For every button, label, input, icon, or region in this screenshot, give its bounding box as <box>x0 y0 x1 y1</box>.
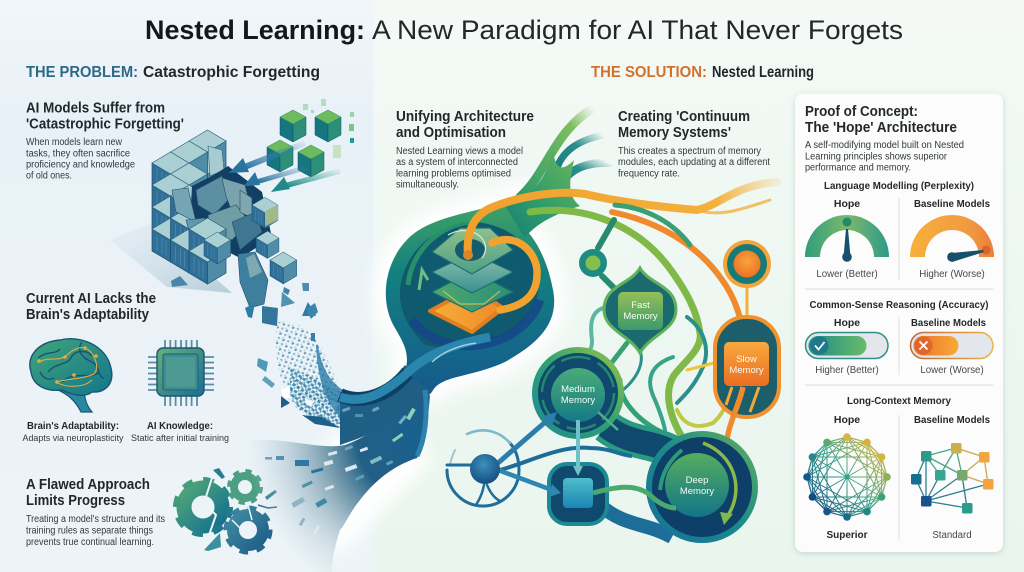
medium memory module <box>535 350 621 436</box>
heading: the solution: THE SOLUTION: <box>591 64 707 81</box>
metric: long-context memory <box>803 395 994 541</box>
arrow: input to square <box>498 470 561 497</box>
icon: brain <box>30 339 112 412</box>
diagram: continuum memory network <box>447 205 779 540</box>
gauge: hope <box>805 215 889 262</box>
text block: AI models suffer: 'Catastrophic Forgetting' <box>26 116 184 132</box>
gauge: baseline <box>910 215 994 262</box>
orange tube <box>468 182 777 255</box>
text block: continuum memory systems: Memory Systems' <box>618 125 731 141</box>
green band under orange tube <box>530 210 700 455</box>
text block: unifying architecture: learning problems optimised <box>396 168 511 180</box>
text block: a flawed approach <box>26 477 165 548</box>
small square module <box>549 464 607 524</box>
card description: performance and memory. <box>805 162 911 174</box>
caption: brain's adaptability: Brain's Adaptability: <box>27 421 119 432</box>
toggle: baseline <box>910 332 993 358</box>
text block: continuum memory systems: This creates a spectrum of memory <box>618 146 761 157</box>
text block: a flawed approach: Limits Progress <box>26 493 125 509</box>
text block: continuum memory systems: modules, each updating at a different <box>618 157 770 168</box>
metric: language modelling: Lower (Better) <box>816 269 878 280</box>
metric: long-context memory: Hope <box>834 414 860 426</box>
metric: common-sense reasoning: Higher (Better) <box>815 365 879 376</box>
text block: AI models suffer: When models learn new <box>26 137 123 148</box>
arrow: input to medium <box>498 412 557 463</box>
network: hope dense <box>803 433 891 521</box>
fast memory module: Memory <box>623 311 658 322</box>
text block: AI models suffer: proficiency and knowledge <box>26 160 135 170</box>
title continuation: A New Paradigm for AI That Never Forgets <box>372 15 903 45</box>
link core: medium to deep <box>606 426 672 452</box>
diagram: flowing stream and nested stack <box>240 108 777 572</box>
metric: common-sense reasoning: Baseline Models <box>911 317 986 329</box>
metric: long-context memory: Long-Context Memory <box>847 395 951 407</box>
text block: a flawed approach: prevents true continual learning. <box>26 537 154 548</box>
small green node <box>579 249 607 277</box>
card description: A self-modifying model built on Nested <box>805 140 964 151</box>
slow memory module <box>715 317 779 463</box>
text block: unifying architecture <box>396 109 534 190</box>
icon: scattering fragments and particles <box>245 252 368 428</box>
text block: unifying architecture: simultaneously. <box>396 180 459 190</box>
icon: broken gears <box>176 468 277 552</box>
card heading <box>805 104 957 136</box>
text block: current AI lacks adaptability: Brain's Adaptability <box>26 307 149 323</box>
loop around input node <box>447 430 519 506</box>
background: problem panel <box>0 0 373 572</box>
heading: the problem: THE PROBLEM: <box>26 64 138 81</box>
icon: shattering cube <box>110 130 279 308</box>
text block: continuum memory systems: Creating 'Continuum <box>618 109 750 125</box>
card description: Learning principles shows superior <box>805 152 948 162</box>
text block: unifying architecture: Nested Learning views a model <box>396 146 523 157</box>
fast memory module <box>604 268 676 353</box>
link: square to deep <box>600 505 672 537</box>
metric: language modelling <box>805 180 994 280</box>
metric: long-context memory: Baseline Models <box>914 414 990 426</box>
metric: common-sense reasoning: Hope <box>834 317 860 329</box>
caption: brain's adaptability: Adapts via neuroplasticity <box>22 433 124 444</box>
toggle: hope <box>806 332 888 358</box>
caption: AI knowledge: Static after initial training <box>131 433 229 444</box>
deep memory module: Memory <box>680 486 714 497</box>
heading: nested learning: Nested Learning <box>712 64 814 81</box>
text block: unifying architecture: and Optimisation <box>396 125 506 141</box>
fast memory module: Fast <box>631 300 650 311</box>
caption: AI knowledge <box>131 421 229 444</box>
text block: unifying architecture: as a system of interconnected <box>396 157 518 168</box>
metric: long-context memory: Superior <box>826 530 868 541</box>
text block: unifying architecture: Unifying Architecture <box>396 109 534 125</box>
caption: AI knowledge: AI Knowledge: <box>147 421 213 432</box>
arrow: medium to square <box>573 420 583 476</box>
deep memory module: Deep <box>686 475 708 486</box>
medium memory module: Memory <box>561 395 595 406</box>
text block: continuum memory systems <box>618 109 770 180</box>
network: baseline sparse <box>911 443 994 514</box>
medium memory module: Medium <box>561 384 595 395</box>
icon: AI chip <box>148 340 214 406</box>
metric: common-sense reasoning <box>806 299 993 376</box>
text block: AI models suffer: of old ones. <box>26 170 72 182</box>
text block: current AI lacks adaptability: Current AI Lacks the <box>26 291 156 307</box>
title: Nested Learning: <box>145 15 365 45</box>
panel: proof of concept <box>795 94 1003 552</box>
text block: continuum memory systems: frequency rate. <box>618 168 680 180</box>
metric: language modelling: Language Modelling (Perplexity) <box>824 180 974 192</box>
link: medium to deep <box>606 426 672 452</box>
deep memory module <box>649 434 755 540</box>
text block: AI models suffer <box>26 100 184 182</box>
metric: common-sense reasoning: Lower (Worse) <box>920 365 984 376</box>
stream particles <box>265 406 416 535</box>
caption: brain's adaptability <box>22 421 124 444</box>
text block: a flawed approach: A Flawed Approach <box>26 477 150 493</box>
metric: language modelling: Baseline Models <box>914 198 990 210</box>
link: square to deep, green <box>593 487 676 508</box>
slow memory module: Memory <box>729 365 764 376</box>
heading: catastrophic forgetting: Catastrophic Forgetting <box>143 64 320 81</box>
text block: a flawed approach: Treating a model's structure and its <box>26 514 165 525</box>
metric: language modelling: Higher (Worse) <box>919 269 985 280</box>
metric: language modelling: Hope <box>834 198 860 210</box>
icon: new green task cubes with arrows <box>229 99 354 192</box>
input node <box>470 454 500 484</box>
orange node <box>723 240 771 288</box>
background: solution panel <box>373 0 1024 572</box>
tubes between memories <box>577 205 747 437</box>
text block: current AI lacks adaptability <box>26 291 156 323</box>
text block: a flawed approach: training rules as separate things <box>26 526 153 536</box>
card description <box>805 140 964 174</box>
card heading: The 'Hope' Architecture <box>805 120 957 136</box>
metric: long-context memory: Standard <box>932 530 972 541</box>
text block: AI models suffer: AI Models Suffer from <box>26 100 165 116</box>
card heading: Proof of Concept: <box>805 104 918 120</box>
stack: nested layers <box>430 228 513 332</box>
text block: AI models suffer: tasks, they often sacrifice <box>26 148 130 160</box>
slow memory module: Slow <box>736 354 757 365</box>
link bands from input node <box>500 448 632 470</box>
metric: common-sense reasoning: Common-Sense Reasoning (Accuracy) <box>810 299 988 311</box>
background halo behind flow <box>335 195 554 540</box>
